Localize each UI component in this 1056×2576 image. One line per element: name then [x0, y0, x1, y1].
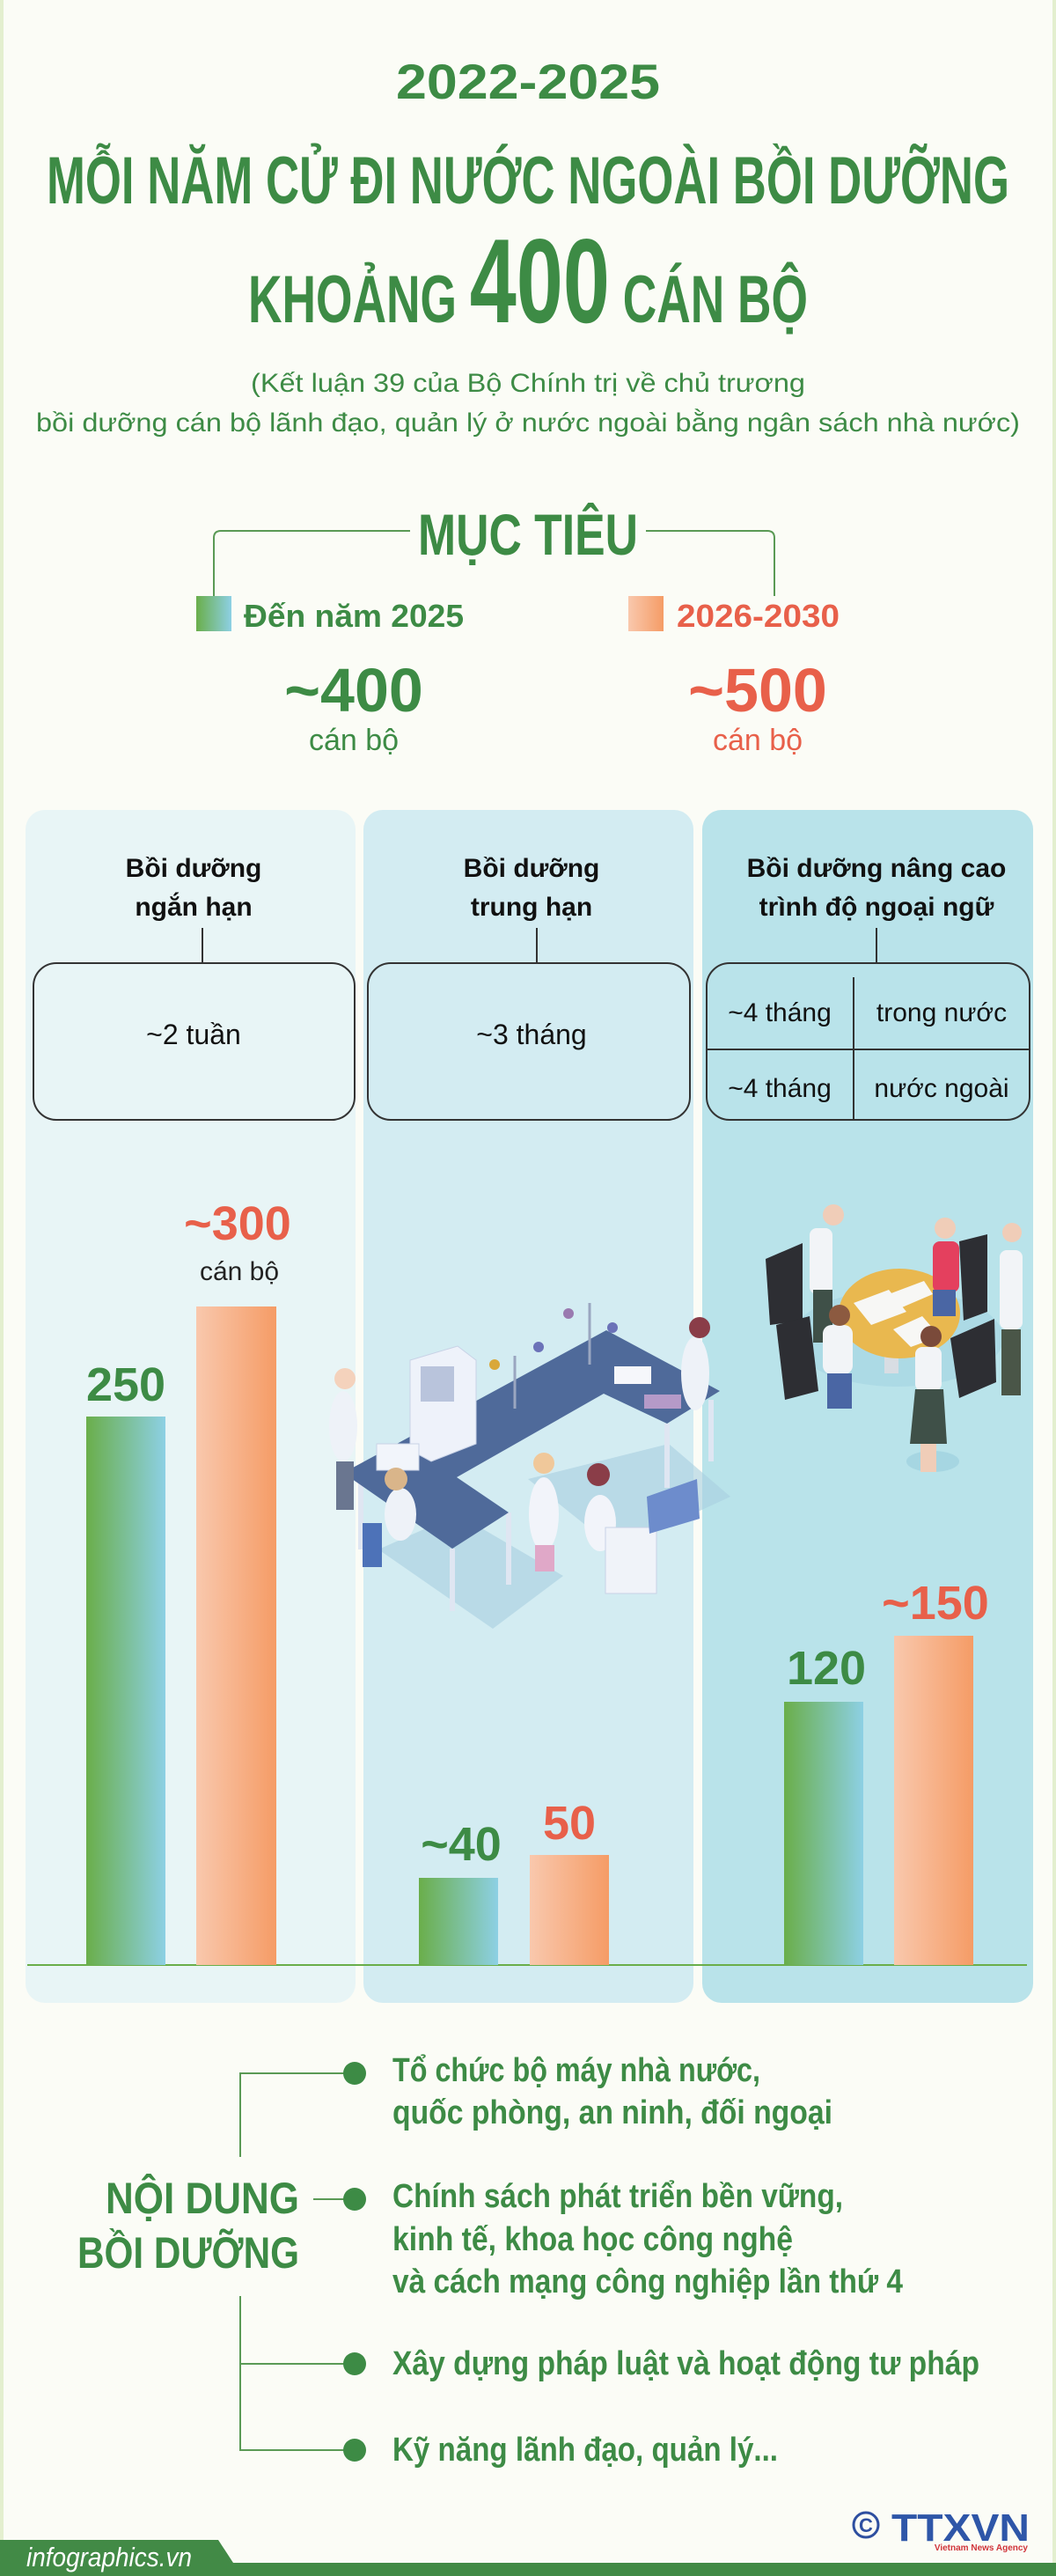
bar chart: [27, 1197, 1027, 1965]
item 1: [343, 2052, 832, 2131]
duration table: trong nước: [876, 998, 1007, 1027]
content heading: noi dung boi duong: [77, 2173, 299, 2278]
bar: ngan han 2025: [86, 1358, 165, 1965]
illustration: meeting: [766, 1204, 1023, 1472]
bar: ngoai ngu 2030: ~150: [882, 1577, 989, 1630]
target: ~500: cán bộ: [713, 724, 803, 757]
content heading: noi dung boi duong: NỘI DUNG: [106, 2173, 299, 2223]
panel heading: ngan han: [126, 854, 261, 922]
panel heading: trung han: Bồi dưỡng: [464, 854, 599, 883]
logo: TTXVN: C: [859, 2514, 873, 2536]
item 2: Chính sách phát triển bền vững,: [392, 2178, 843, 2215]
panel: ngan han: [26, 810, 356, 2003]
subtitle: bồi dưỡng cán bộ lãnh đạo, quản lý ở nước ngoài bằng ngân sách nhà nước): [36, 408, 1020, 438]
footer: infographics.vn: [26, 2542, 192, 2572]
panel heading: trung han: [464, 854, 599, 922]
target: ~500: ~500: [688, 656, 827, 725]
title: years: 2022-2025: [396, 54, 660, 109]
item 2: và cách mạng công nghiệp lần thứ 4: [392, 2263, 903, 2300]
panel heading: ngoai ngu: trình độ ngoại ngữ: [759, 893, 994, 922]
logo: TTXVN: [854, 2506, 1030, 2553]
title: main line 2: KHOẢNG 400 CÁN BỘ: [248, 214, 808, 348]
bar: ngoai ngu 2025: [784, 1642, 866, 1965]
item 4: Kỹ năng lãnh đạo, quản lý...: [392, 2432, 778, 2469]
item 1: Tổ chức bộ máy nhà nước,: [392, 2052, 760, 2089]
panel: trung han: [363, 810, 693, 2003]
bar: ngan han 2030: [184, 1197, 291, 1965]
target: ~400: [284, 656, 423, 757]
duration box: 2 tuan: ~2 tuần: [146, 1019, 241, 1050]
panel heading: ngan han: ngắn hạn: [135, 892, 253, 922]
bar: ngan han 2030: ~300: [184, 1197, 291, 1250]
duration box: 2 tuan: [33, 963, 355, 1120]
bar: ngoai ngu 2025: 120: [787, 1642, 866, 1695]
bar: trung han 2030: 50: [543, 1797, 596, 1850]
bar: ngoai ngu 2030: [882, 1577, 989, 1965]
duration table: ~4 tháng: [728, 998, 832, 1027]
bar: ngan han 2025: 250: [86, 1358, 165, 1411]
duration box: 3 thang: ~3 tháng: [476, 1019, 587, 1050]
bar: trung han 2025: [419, 1818, 502, 1965]
illustration: laboratory: [329, 1303, 730, 1629]
item 3: Xây dựng pháp luật và hoạt động tư pháp: [392, 2345, 979, 2382]
content heading: noi dung boi duong: BỒI DƯỠNG: [77, 2227, 299, 2278]
target: ~400: cán bộ: [309, 724, 399, 757]
duration table: nước ngoài: [874, 1074, 1009, 1103]
bar: trung han 2025: ~40: [421, 1818, 502, 1871]
duration box: 3 thang: [368, 963, 690, 1120]
logo: TTXVN: TTXVN: [891, 2506, 1030, 2550]
target: ~500: [688, 656, 827, 757]
panel heading: ngan han: Bồi dưỡng: [126, 854, 261, 883]
legend: 2026-2030: 2026-2030: [677, 598, 840, 634]
item 2: [343, 2178, 903, 2300]
panel heading: trung han: trung hạn: [471, 893, 592, 922]
legend: den nam 2025: Đến năm 2025: [244, 598, 464, 634]
figures: [329, 1391, 357, 1461]
panel: ngoai ngu: [702, 810, 1033, 2003]
heading: muc tieu: MỤC TIÊU: [418, 502, 638, 567]
legend: 2026-2030: [628, 596, 840, 634]
footer: [0, 2540, 1056, 2576]
bar: ngan han 2030: cán bộ: [200, 1257, 279, 1286]
panel heading: ngoai ngu: Bồi dưỡng nâng cao: [747, 854, 1006, 883]
duration table: ~4 tháng: [728, 1074, 832, 1103]
target: ~400: ~400: [284, 656, 423, 725]
panel heading: ngoai ngu: [747, 854, 1006, 922]
subtitle: (Kết luận 39 của Bộ Chính trị về chủ trương: [251, 369, 805, 398]
duration table: [707, 963, 1030, 1120]
item 2: kinh tế, khoa học công nghệ: [392, 2221, 793, 2258]
content list: [343, 2052, 979, 2469]
logo: TTXVN: Vietnam News Agency: [935, 2543, 1028, 2553]
bar: trung han 2030: [530, 1797, 609, 1965]
item 1: quốc phòng, an ninh, đối ngoại: [392, 2094, 832, 2131]
subtitle: [36, 369, 1020, 438]
